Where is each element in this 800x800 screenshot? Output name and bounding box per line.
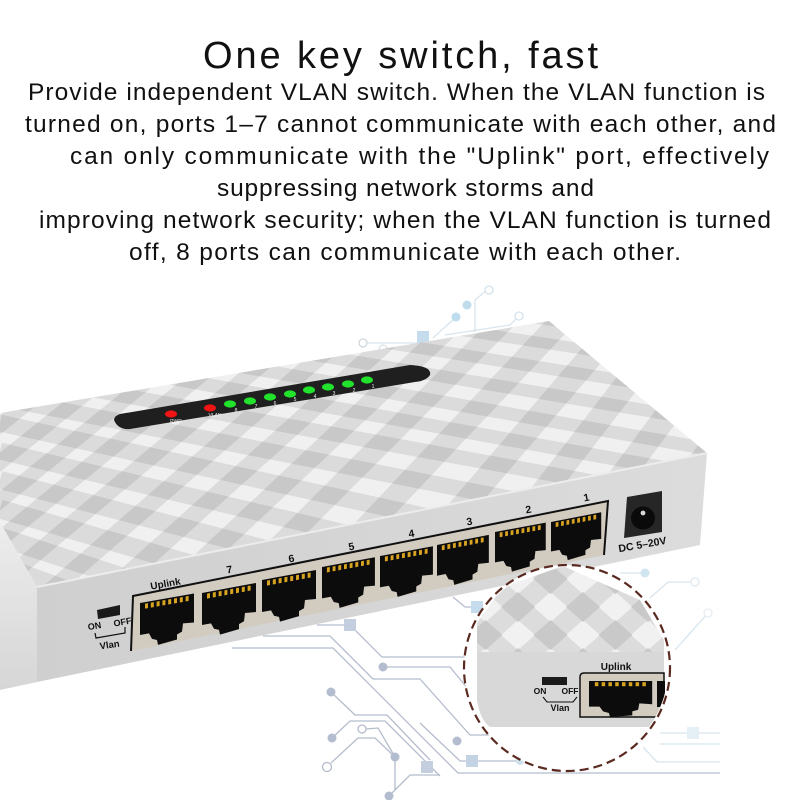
network switch: [0, 321, 707, 690]
port number labels: [150, 492, 591, 593]
description text block: Provide independent VLAN switch. When the VLAN function is: [28, 79, 765, 106]
port: Uplink: [140, 593, 194, 648]
LED captions: 2: [353, 388, 356, 394]
LED captions: 3: [333, 391, 336, 397]
description text block: turned on, ports 1–7 cannot communicate with each other, and: [25, 111, 776, 138]
DC voltage label: DC 5–20V: [618, 535, 667, 555]
inset plaid top: [477, 566, 664, 652]
description text block: [25, 79, 776, 266]
switch left side face: [0, 522, 37, 690]
port: 1: [551, 512, 601, 563]
title: One key switch, fast: [203, 35, 598, 77]
inset Vlan slide switch: [534, 677, 578, 713]
port: 2: [495, 523, 546, 575]
inset Vlan slide switch: Vlan: [550, 703, 570, 713]
background circuit traces: lower left: [232, 597, 720, 800]
description text block: can only communicate with the "Uplink" port, effectively: [70, 143, 770, 170]
port bezel: [131, 501, 608, 651]
port number labels: 4: [408, 528, 416, 540]
LED captions: 7: [255, 404, 258, 410]
background circuit traces: upper centre: [359, 286, 523, 353]
port number labels: 6: [288, 553, 296, 565]
inset front face: [477, 652, 664, 727]
inset Vlan slide switch: OFF: [562, 686, 578, 696]
LED captions: VLAN: [208, 413, 222, 419]
port: 3: [437, 535, 489, 588]
LED captions: 4: [314, 394, 317, 400]
green port LEDs: [224, 376, 373, 408]
description text block: suppressing network storms and: [217, 175, 594, 202]
inset Uplink port: [589, 681, 652, 717]
LED captions: [170, 384, 375, 425]
switch top face with plaid pattern: [0, 321, 706, 586]
DC power jack: [618, 491, 667, 555]
LED captions: 8: [235, 408, 238, 414]
inset dashed ring: [464, 565, 670, 771]
background circuit traces: right: [620, 568, 720, 762]
port: 6: [262, 570, 316, 625]
port number labels: 5: [348, 541, 356, 553]
description text block: off, 8 ports can communicate with each other.: [129, 239, 681, 266]
port number labels: 3: [466, 516, 474, 528]
port number labels: 2: [525, 504, 533, 516]
VLAN slide switch: [87, 605, 133, 652]
LED captions: PWR: [170, 419, 182, 425]
VLAN slide switch: OFF: [113, 615, 133, 629]
inset Uplink label: Uplink: [601, 662, 632, 673]
port number labels: 7: [226, 564, 234, 576]
red status LEDs: [165, 404, 216, 418]
magnified inset: Vlan switch and Uplink port: [464, 565, 670, 771]
port number labels: Uplink: [150, 576, 182, 593]
port: 4: [380, 546, 433, 600]
LED captions: 6: [274, 401, 277, 407]
port number labels: 1: [583, 492, 591, 504]
LED captions: 5: [294, 397, 297, 403]
LED captions: 1: [372, 384, 375, 390]
port: 5: [322, 557, 375, 611]
LED indicator strip: [114, 365, 430, 429]
VLAN slide switch: Vlan: [99, 639, 121, 652]
description text block: improving network security; when the VLAN function is turned: [39, 207, 771, 234]
VLAN slide switch: ON: [87, 620, 102, 632]
inset Vlan slide switch: ON: [534, 686, 546, 696]
inset Uplink bezel: [580, 673, 664, 717]
switch front face: [37, 453, 707, 682]
port: 7: [202, 583, 256, 638]
